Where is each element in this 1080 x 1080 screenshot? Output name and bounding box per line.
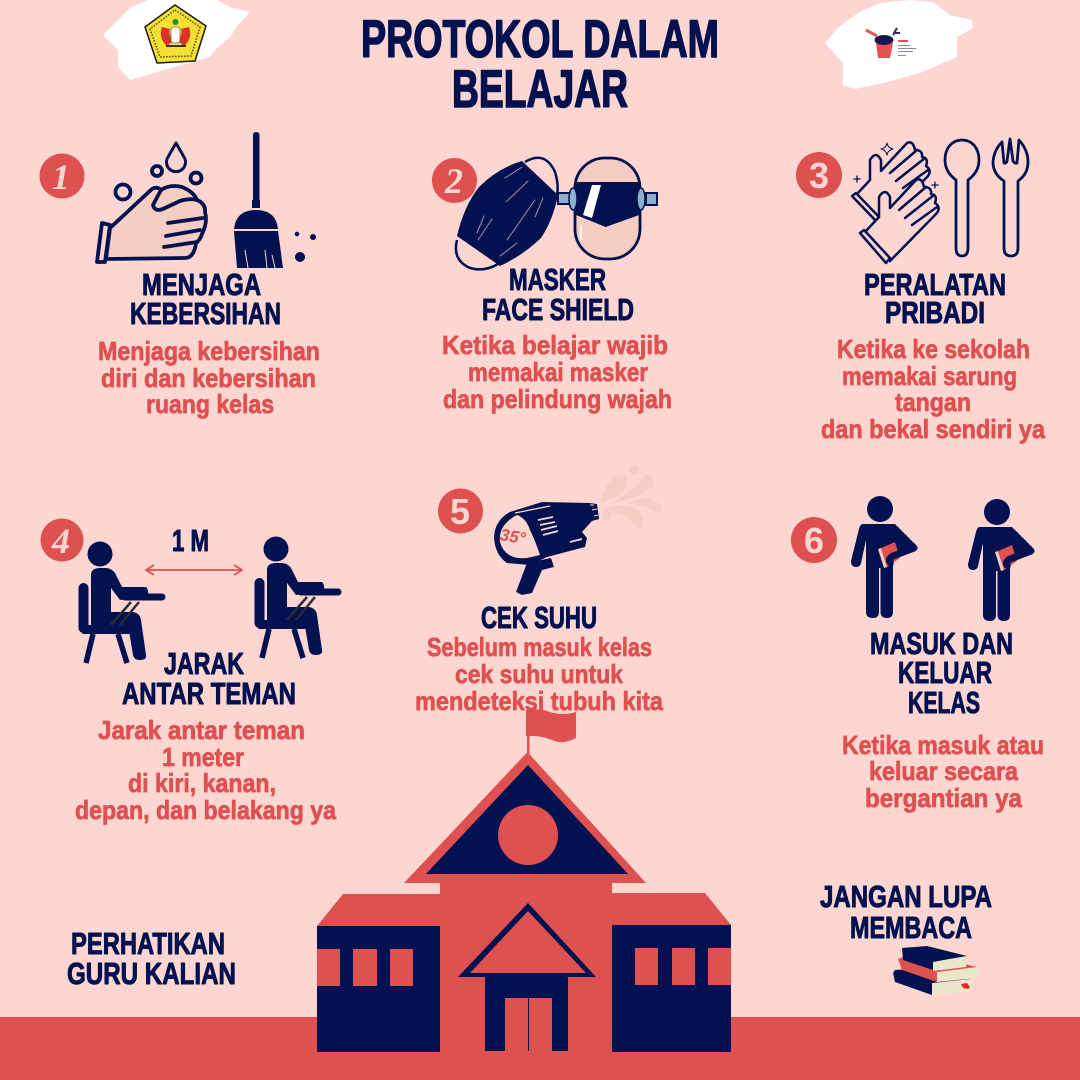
heading 6: KELUAR <box>898 655 992 690</box>
badge 5 <box>438 488 483 534</box>
heading 2: FACE SHIELD <box>482 292 634 327</box>
icon: fork <box>993 139 1028 256</box>
text 6: bergantian ya <box>865 783 1022 813</box>
panel 1: menjaga kebersihan <box>40 132 320 419</box>
badge 5: 5 <box>450 491 470 532</box>
title: BELAJAR <box>452 60 628 119</box>
icon: person with book right <box>968 499 1034 621</box>
heading 4 <box>122 646 296 711</box>
badge 4: 4 <box>51 521 70 561</box>
badge 1 <box>40 154 84 198</box>
text 4: 1 meter <box>162 742 244 772</box>
text 2: memakai masker <box>468 357 648 387</box>
main roof <box>404 752 646 883</box>
icon: gloves <box>852 142 939 263</box>
heading 3: PRIBADI <box>885 295 985 330</box>
text 3: tangan <box>895 387 971 417</box>
heading 3: PERALATAN <box>864 267 1006 302</box>
text 1: Menjaga kebersihan <box>98 336 320 366</box>
label: 1 M: 1 M <box>172 523 209 558</box>
panel 4: jarak antar teman <box>40 518 338 825</box>
text 3 <box>821 334 1045 444</box>
caption: perhatikan guru kalian <box>67 926 236 991</box>
badge 2: 2 <box>444 161 463 201</box>
text 3: memakai sarung <box>842 361 1017 391</box>
icon: mask <box>456 158 558 269</box>
school building <box>317 709 731 1053</box>
icon: stack of books <box>893 946 978 996</box>
left wing <box>317 926 440 1052</box>
entrance <box>458 903 596 1051</box>
heading 3 <box>864 267 1006 330</box>
badge 1: 1 <box>52 157 70 197</box>
badge 3 <box>796 152 842 198</box>
logo right: pot emblem on white brush stroke <box>825 0 973 89</box>
ground band <box>0 1017 1080 1080</box>
caption: jangan lupa membaca: JANGAN LUPA <box>820 879 992 914</box>
text 1: ruang kelas <box>146 389 274 419</box>
badge 6 <box>791 517 837 563</box>
text 6 <box>842 730 1044 813</box>
text 4 <box>75 715 336 825</box>
badge 2 <box>432 158 477 203</box>
icon: person with book left <box>851 496 917 618</box>
icon: face shield <box>558 158 657 259</box>
heading 6: KELAS <box>908 685 980 720</box>
heading 1: KEBERSIHAN <box>130 296 281 331</box>
caption: perhatikan guru kalian: PERHATIKAN <box>71 926 225 961</box>
icon: washing hands <box>97 143 206 262</box>
text 2 <box>442 330 672 414</box>
badge 3: 3 <box>809 155 829 196</box>
panel 6: masuk dan keluar kelas <box>791 496 1044 813</box>
caption: jangan lupa membaca <box>820 879 992 945</box>
text 3: dan bekal sendiri ya <box>821 414 1045 444</box>
badge 4 <box>40 518 84 562</box>
caption: jangan lupa membaca: MEMBACA <box>850 910 972 945</box>
text 6: keluar secara <box>869 756 1018 786</box>
text 4: di kiri, kanan, <box>128 768 276 798</box>
text 4: depan, dan belakang ya <box>75 795 336 825</box>
icon: broom <box>234 132 316 268</box>
text 1 <box>98 336 320 419</box>
icon: thermo gun <box>494 502 599 595</box>
heading 6 <box>870 626 1013 720</box>
central body and wing roofs <box>317 883 731 1053</box>
text 5: mendeteksi tubuh kita <box>415 686 663 716</box>
text 2: dan pelindung wajah <box>443 384 672 414</box>
icon: spoon <box>945 140 979 256</box>
heading 1 <box>130 267 281 331</box>
heading 2: MASKER <box>509 262 606 297</box>
text 3: Ketika ke sekolah <box>837 334 1030 364</box>
text 5 <box>415 632 663 716</box>
text 1: diri dan kebersihan <box>101 363 316 393</box>
icon: thermo gun: 35° <box>498 525 527 548</box>
flag <box>526 709 576 755</box>
heading 1: MENJAGA <box>142 267 261 302</box>
panel 2: masker dan face shield <box>432 158 672 414</box>
heading 6: MASUK DAN <box>870 626 1013 661</box>
heading 2 <box>482 262 634 327</box>
logo left: university crest on white brush stroke <box>103 0 250 80</box>
icon: student at desk right <box>254 536 338 658</box>
panel 3: peralatan pribadi <box>796 139 1045 444</box>
text 5: cek suhu untuk <box>455 659 623 689</box>
panel 5: cek suhu <box>415 465 663 716</box>
caption: perhatikan guru kalian: GURU KALIAN <box>67 956 236 991</box>
heading 5: CEK SUHU <box>481 600 597 635</box>
title: PROTOKOL DALAM <box>361 10 719 69</box>
text 4: Jarak antar teman <box>98 715 305 745</box>
arrow: distance <box>146 565 242 575</box>
text 6: Ketika masuk atau <box>842 730 1044 760</box>
text 5: Sebelum masuk kelas <box>427 632 652 662</box>
heading 4: JARAK <box>164 646 244 681</box>
icon: spray droplets <box>600 465 662 528</box>
title <box>361 10 719 119</box>
right wing <box>612 925 731 1052</box>
text 2: Ketika belajar wajib <box>442 330 668 360</box>
icon: student at desk left <box>78 542 162 663</box>
heading 4: ANTAR TEMAN <box>122 676 296 711</box>
badge 6: 6 <box>804 520 824 561</box>
